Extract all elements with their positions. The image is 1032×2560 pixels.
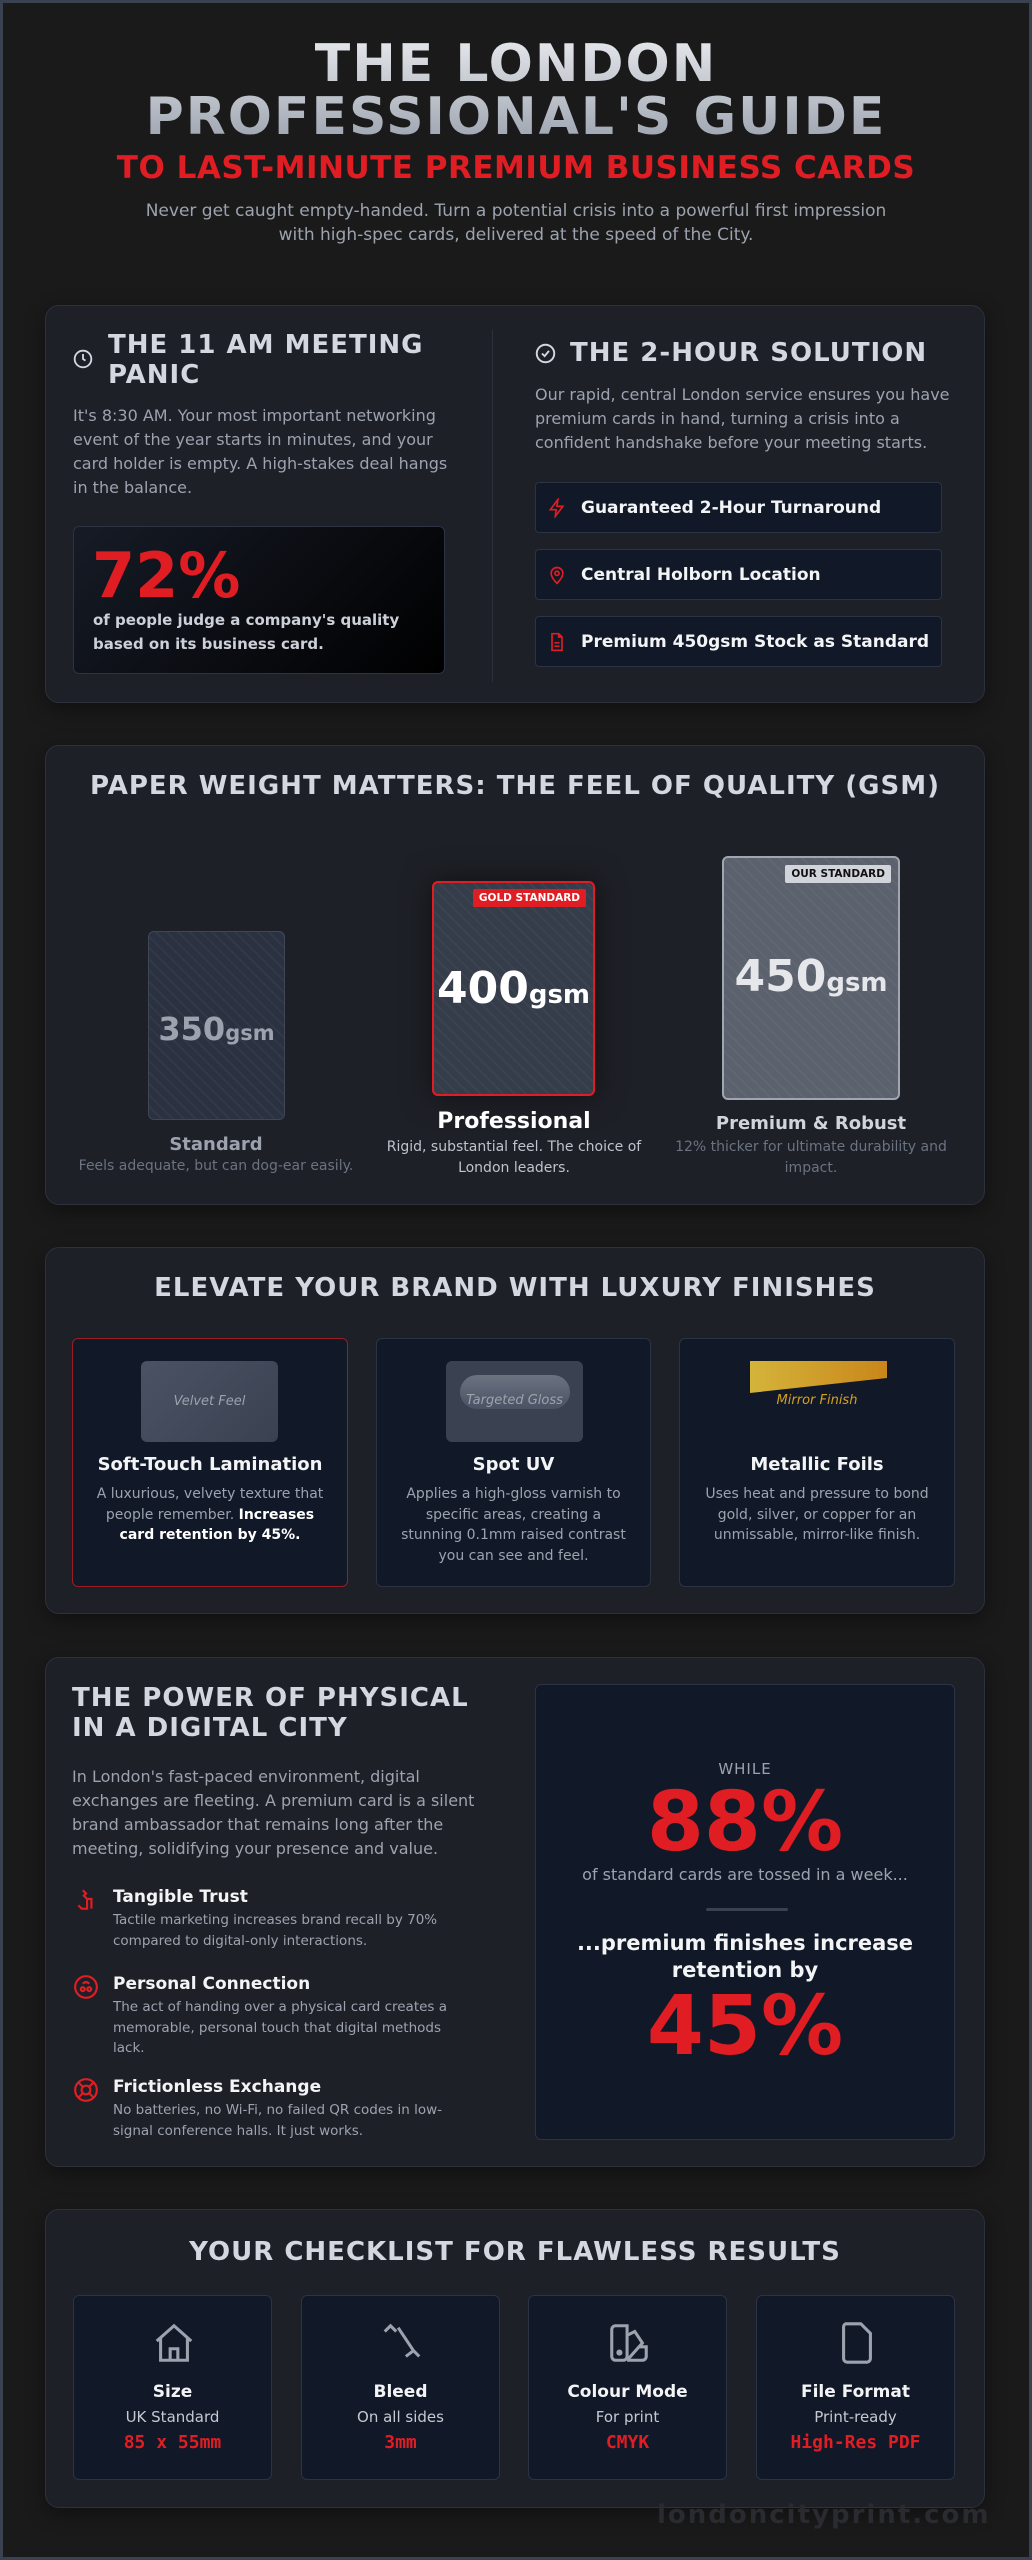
heading: luxury finishes: ELEVATE YOUR BRAND WITH LUXURY FINISHES: [154, 1273, 876, 1303]
card: bleed: [301, 2295, 500, 2480]
heading: power of physical: [72, 1683, 469, 1743]
text: Applies a high-gloss varnish to specific areas, creating a stunning 0.1mm raised contrast you can see and feel.: [401, 1486, 626, 1564]
heading: 2-hour solution: THE 2-HOUR SOLUTION: [570, 338, 927, 368]
panel: luxury finishes: [45, 1247, 985, 1614]
card: colour mode: CMYK: [606, 2432, 649, 2453]
label: professional: Professional: [437, 1109, 591, 1134]
title: [0, 38, 1032, 144]
card: bleed: Bleed: [373, 2382, 428, 2402]
heading: power of physical: THE POWER OF PHYSICAL: [72, 1683, 469, 1713]
title: PROFESSIONAL'S GUIDE: [146, 87, 886, 147]
panel: meeting panic & solution: [45, 305, 985, 703]
stat box: 88% / 45%: WHILE: [718, 1760, 772, 1778]
card: file format: [756, 2295, 955, 2480]
stat box: 88% / 45%: retention by: [672, 1958, 818, 1982]
card: size: [73, 2295, 272, 2480]
stat box: 72%: 72%: [92, 539, 240, 612]
stat box: 88% / 45%: [535, 1684, 955, 2140]
card: 350gsm: [148, 931, 285, 1120]
card: file format: Print-ready: [814, 2408, 897, 2426]
icon: check circle: [536, 344, 556, 364]
card: bleed: 3mm: [384, 2432, 417, 2453]
stat box: 72%: of people judge a company's quality based on its business card.: [93, 611, 399, 653]
subtitle: TO LAST-MINUTE PREMIUM BUSINESS CARDS: [117, 150, 915, 186]
text: Rigid, substantial feel. The choice of London leaders.: [387, 1139, 641, 1176]
text: Frictionless Exchange: [113, 2077, 321, 2097]
card: colour mode: [528, 2295, 727, 2480]
intro text: with high-spec cards, delivered at the speed of the City.: [279, 224, 753, 244]
card: 450gsm: 450gsm: [734, 951, 888, 1002]
text: Soft-Touch Lamination: [98, 1454, 322, 1475]
text: solution description: Our rapid, central London service ensures you have premium cards in hand, turning a crisis into a confident handshake before your meeting starts.: [535, 385, 950, 452]
panel: paper weight: [45, 745, 985, 1205]
card: file format: High-Res PDF: [790, 2432, 921, 2453]
text: Spot UV: [473, 1454, 554, 1475]
feature: tangible trust: [78, 1887, 437, 1948]
feature: stock: [535, 616, 942, 667]
label: standard: Standard: [169, 1134, 263, 1155]
card: 350gsm: 350gsm: [158, 1010, 275, 1048]
card: 400gsm: 400gsm: [437, 963, 590, 1014]
watermark: londoncityprint.com: [657, 2500, 990, 2530]
text: 12% thicker for ultimate durability and impact.: [675, 1139, 947, 1176]
text: Uses heat and pressure to bond gold, silver, or copper for an unmissable, mirror-like finish.: [705, 1486, 929, 1543]
card: metallic foils: Mirror Finish: [777, 1393, 857, 1408]
card: spot UV: [376, 1338, 651, 1587]
heading: 11 AM meeting panic: PANIC: [108, 360, 200, 390]
feature: personal connection: [74, 1974, 447, 2056]
card: metallic foils: [679, 1338, 955, 1587]
card: 450gsm: [722, 856, 900, 1100]
feature: turnaround: Guaranteed 2-Hour Turnaround: [581, 498, 881, 518]
title: THE LONDON: [315, 34, 717, 94]
text: The act of handing over a physical card creates a memorable, personal touch that digital methods lack.: [113, 1999, 447, 2056]
feature: stock: Premium 450gsm Stock as Standard: [581, 632, 929, 652]
intro text: Never get caught empty-handed. Turn a potential crisis into a powerful first impression: [146, 201, 886, 221]
panel: checklist: [45, 2209, 985, 2508]
card: soft-touch: Velvet Feel: [174, 1394, 245, 1409]
card: colour mode: For print: [596, 2408, 659, 2426]
text: Tangible Trust: [113, 1887, 248, 1907]
card: colour mode: Colour Mode: [567, 2382, 688, 2402]
card: 450gsm: OUR STANDARD: [791, 868, 885, 880]
stat box: 72%: [73, 526, 445, 674]
card: 400gsm: [432, 881, 595, 1096]
stat box: 88% / 45%: 88%: [647, 1775, 843, 1870]
text: physical intro: In London's fast-paced environment, digital exchanges are fleeting. A premium card is a silent brand ambassador that remains long after the meeting, solidifying your presence and value.: [72, 1767, 474, 1858]
panel: power of physical: [45, 1657, 985, 2167]
card: file format: File Format: [801, 2382, 910, 2402]
text: panic description: It's 8:30 AM. Your most important networking event of the year starts in minutes, and your card holder is empty. A high-stakes deal hangs in the balance.: [73, 406, 447, 497]
text: Feels adequate, but can dog-ear easily.: [79, 1158, 353, 1174]
card: size: 85 x 55mm: [124, 2432, 221, 2453]
feature: turnaround: [535, 482, 942, 533]
feature: frictionless exchange: [74, 2077, 442, 2138]
intro text: [146, 201, 886, 244]
text: Tactile marketing increases brand recall by 70% compared to digital-only interactions.: [113, 1912, 437, 1948]
card: soft-touch: [72, 1338, 348, 1587]
stat box: 88% / 45%: ...premium finishes increase: [577, 1931, 913, 1955]
label: premium: Premium & Robust: [716, 1113, 906, 1134]
card: 400gsm: GOLD STANDARD: [479, 892, 580, 904]
heading: 11 AM meeting panic: [108, 330, 424, 390]
text: No batteries, no Wi-Fi, no failed QR codes in low-signal conference halls. It just works.: [113, 2102, 442, 2138]
feature: location: [535, 549, 942, 600]
card: spot UV: Targeted Gloss: [466, 1393, 563, 1408]
card: bleed: On all sides: [357, 2408, 444, 2426]
text: Personal Connection: [113, 1974, 310, 1994]
feature: location: Central Holborn Location: [581, 565, 821, 585]
card: size: UK Standard: [126, 2408, 219, 2426]
heading: paper weight: PAPER WEIGHT MATTERS: THE FEEL OF QUALITY (GSM): [90, 771, 940, 801]
icon: clock: [74, 350, 92, 368]
heading: 11 AM meeting panic: THE 11 AM MEETING: [108, 330, 424, 360]
heading: power of physical: IN A DIGITAL CITY: [72, 1713, 348, 1743]
stat box: 88% / 45%: of standard cards are tossed in a week...: [582, 1865, 908, 1884]
text: A luxurious, velvety texture that people remember. Increases card retention by 45%.: [97, 1486, 323, 1543]
text: Metallic Foils: [750, 1454, 884, 1475]
heading: checklist: YOUR CHECKLIST FOR FLAWLESS RESULTS: [189, 2237, 841, 2267]
card: size: Size: [153, 2382, 192, 2402]
stat box: 88% / 45%: 45%: [647, 1979, 843, 2074]
